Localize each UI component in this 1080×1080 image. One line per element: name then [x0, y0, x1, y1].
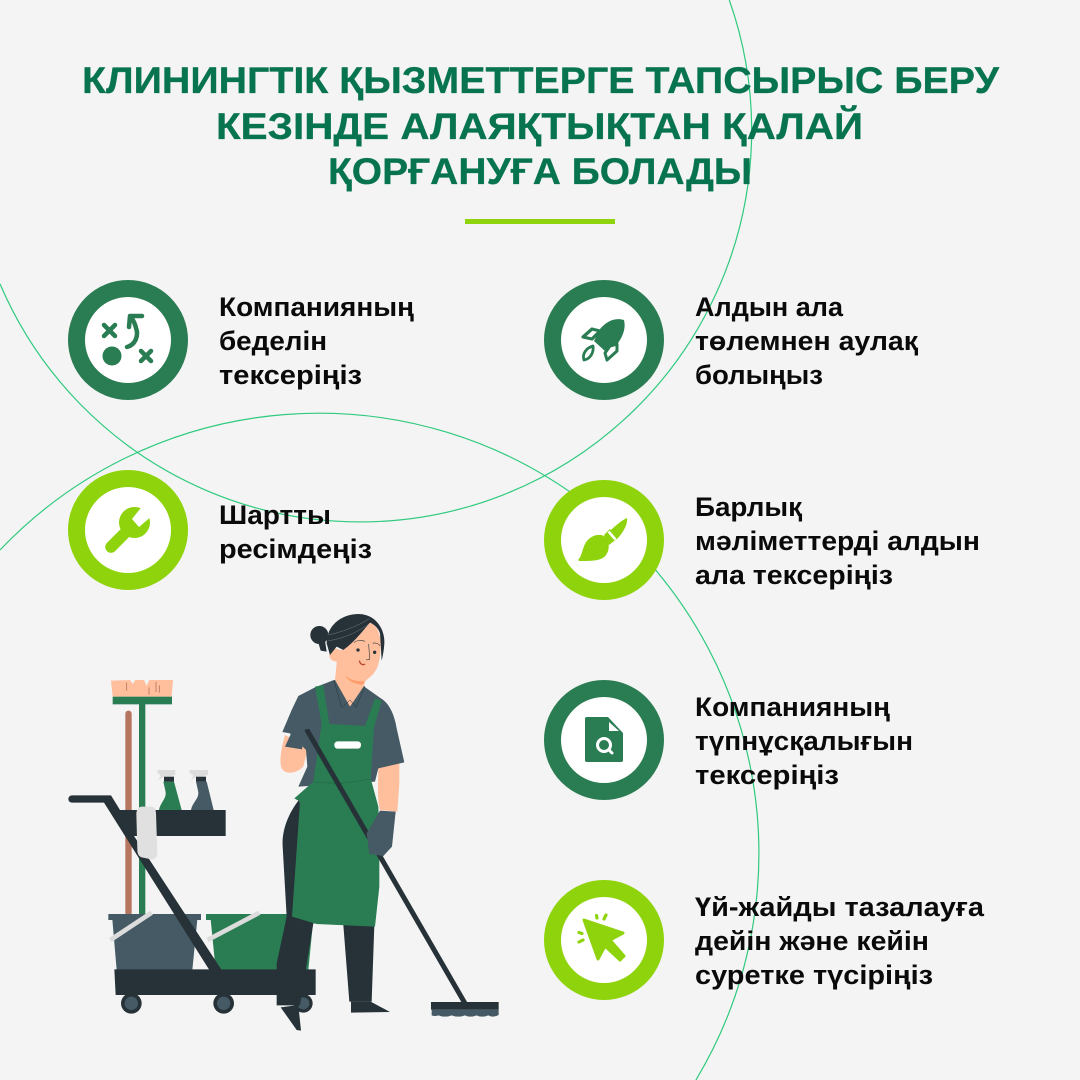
arms	[280, 735, 399, 812]
face details	[354, 640, 380, 665]
grey bucket	[108, 913, 201, 970]
title: КЛИНИНГТІК ҚЫЗМЕТТЕРГЕ ТАПСЫРЫС БЕРУ	[82, 60, 1000, 101]
text: item 6: Үй-жайды тазалауға	[695, 892, 985, 922]
legs	[277, 799, 374, 1005]
collar	[334, 680, 365, 708]
icon: wrench	[111, 504, 153, 547]
text: item 2	[219, 500, 372, 564]
text: item 3: болыңыз	[695, 360, 823, 390]
apron	[292, 685, 382, 927]
spray bottles	[157, 770, 214, 810]
icon: paint brush	[578, 518, 627, 561]
text: item 3	[695, 292, 919, 390]
text: item 6: дейін және кейін	[695, 926, 929, 956]
shirt	[282, 680, 404, 787]
neck and face	[335, 623, 381, 707]
icon: document search	[585, 717, 623, 762]
text: item 4	[695, 492, 980, 590]
text: item 6: суретке түсіріңіз	[695, 960, 933, 990]
text: item 6	[695, 892, 985, 990]
text: item 5	[695, 692, 913, 790]
panel: item 5 authenticity	[552, 688, 913, 792]
text: item 3: Алдын ала	[695, 292, 844, 322]
text: item 4: ала тексеріңіз	[695, 560, 893, 590]
mop	[306, 728, 499, 1017]
shoes	[281, 1002, 390, 1031]
text: item 1: Компанияның	[219, 292, 414, 322]
panel: item 2 contract	[76, 478, 372, 582]
name badge	[334, 741, 361, 749]
cart frame and shelf	[68, 795, 316, 1014]
title	[82, 60, 1000, 192]
title: КЕЗІНДЕ АЛАЯҚТЫҚТАН ҚАЛАЙ	[216, 105, 863, 147]
hair	[327, 614, 384, 661]
text: item 5: Компанияның	[695, 692, 890, 722]
person	[277, 614, 499, 1031]
text: item 3: төлемнен аулақ	[695, 326, 919, 356]
text: item 1	[219, 292, 414, 390]
panel: item 4 verify details	[552, 488, 980, 592]
panel: item 1 reputation	[76, 288, 414, 392]
text: item 4: мәліметтерді алдын	[695, 526, 980, 556]
panel: item 6 photos	[552, 888, 985, 992]
gloves	[285, 712, 396, 856]
green bucket	[206, 913, 313, 970]
icon: cursor click	[579, 915, 624, 960]
icon: rocket	[583, 319, 625, 360]
title: ҚОРҒАНУҒА БОЛАДЫ	[328, 151, 752, 192]
text: item 2: Шартты	[219, 500, 331, 530]
text: item 2: ресімдеңіз	[219, 534, 372, 564]
illustration: cleaner with cart	[68, 614, 499, 1031]
icon: strategy	[102, 316, 151, 366]
panel: item 3 prepayment	[552, 288, 919, 392]
text: item 4: Барлық	[695, 492, 802, 522]
cloth	[136, 807, 157, 859]
text: item 5: тексеріңіз	[695, 760, 839, 790]
text: item 5: түпнұсқалығын	[695, 726, 913, 756]
text: item 1: беделін	[219, 326, 327, 356]
text: item 1: тексеріңіз	[219, 360, 362, 390]
broom and mop handles	[111, 680, 173, 916]
